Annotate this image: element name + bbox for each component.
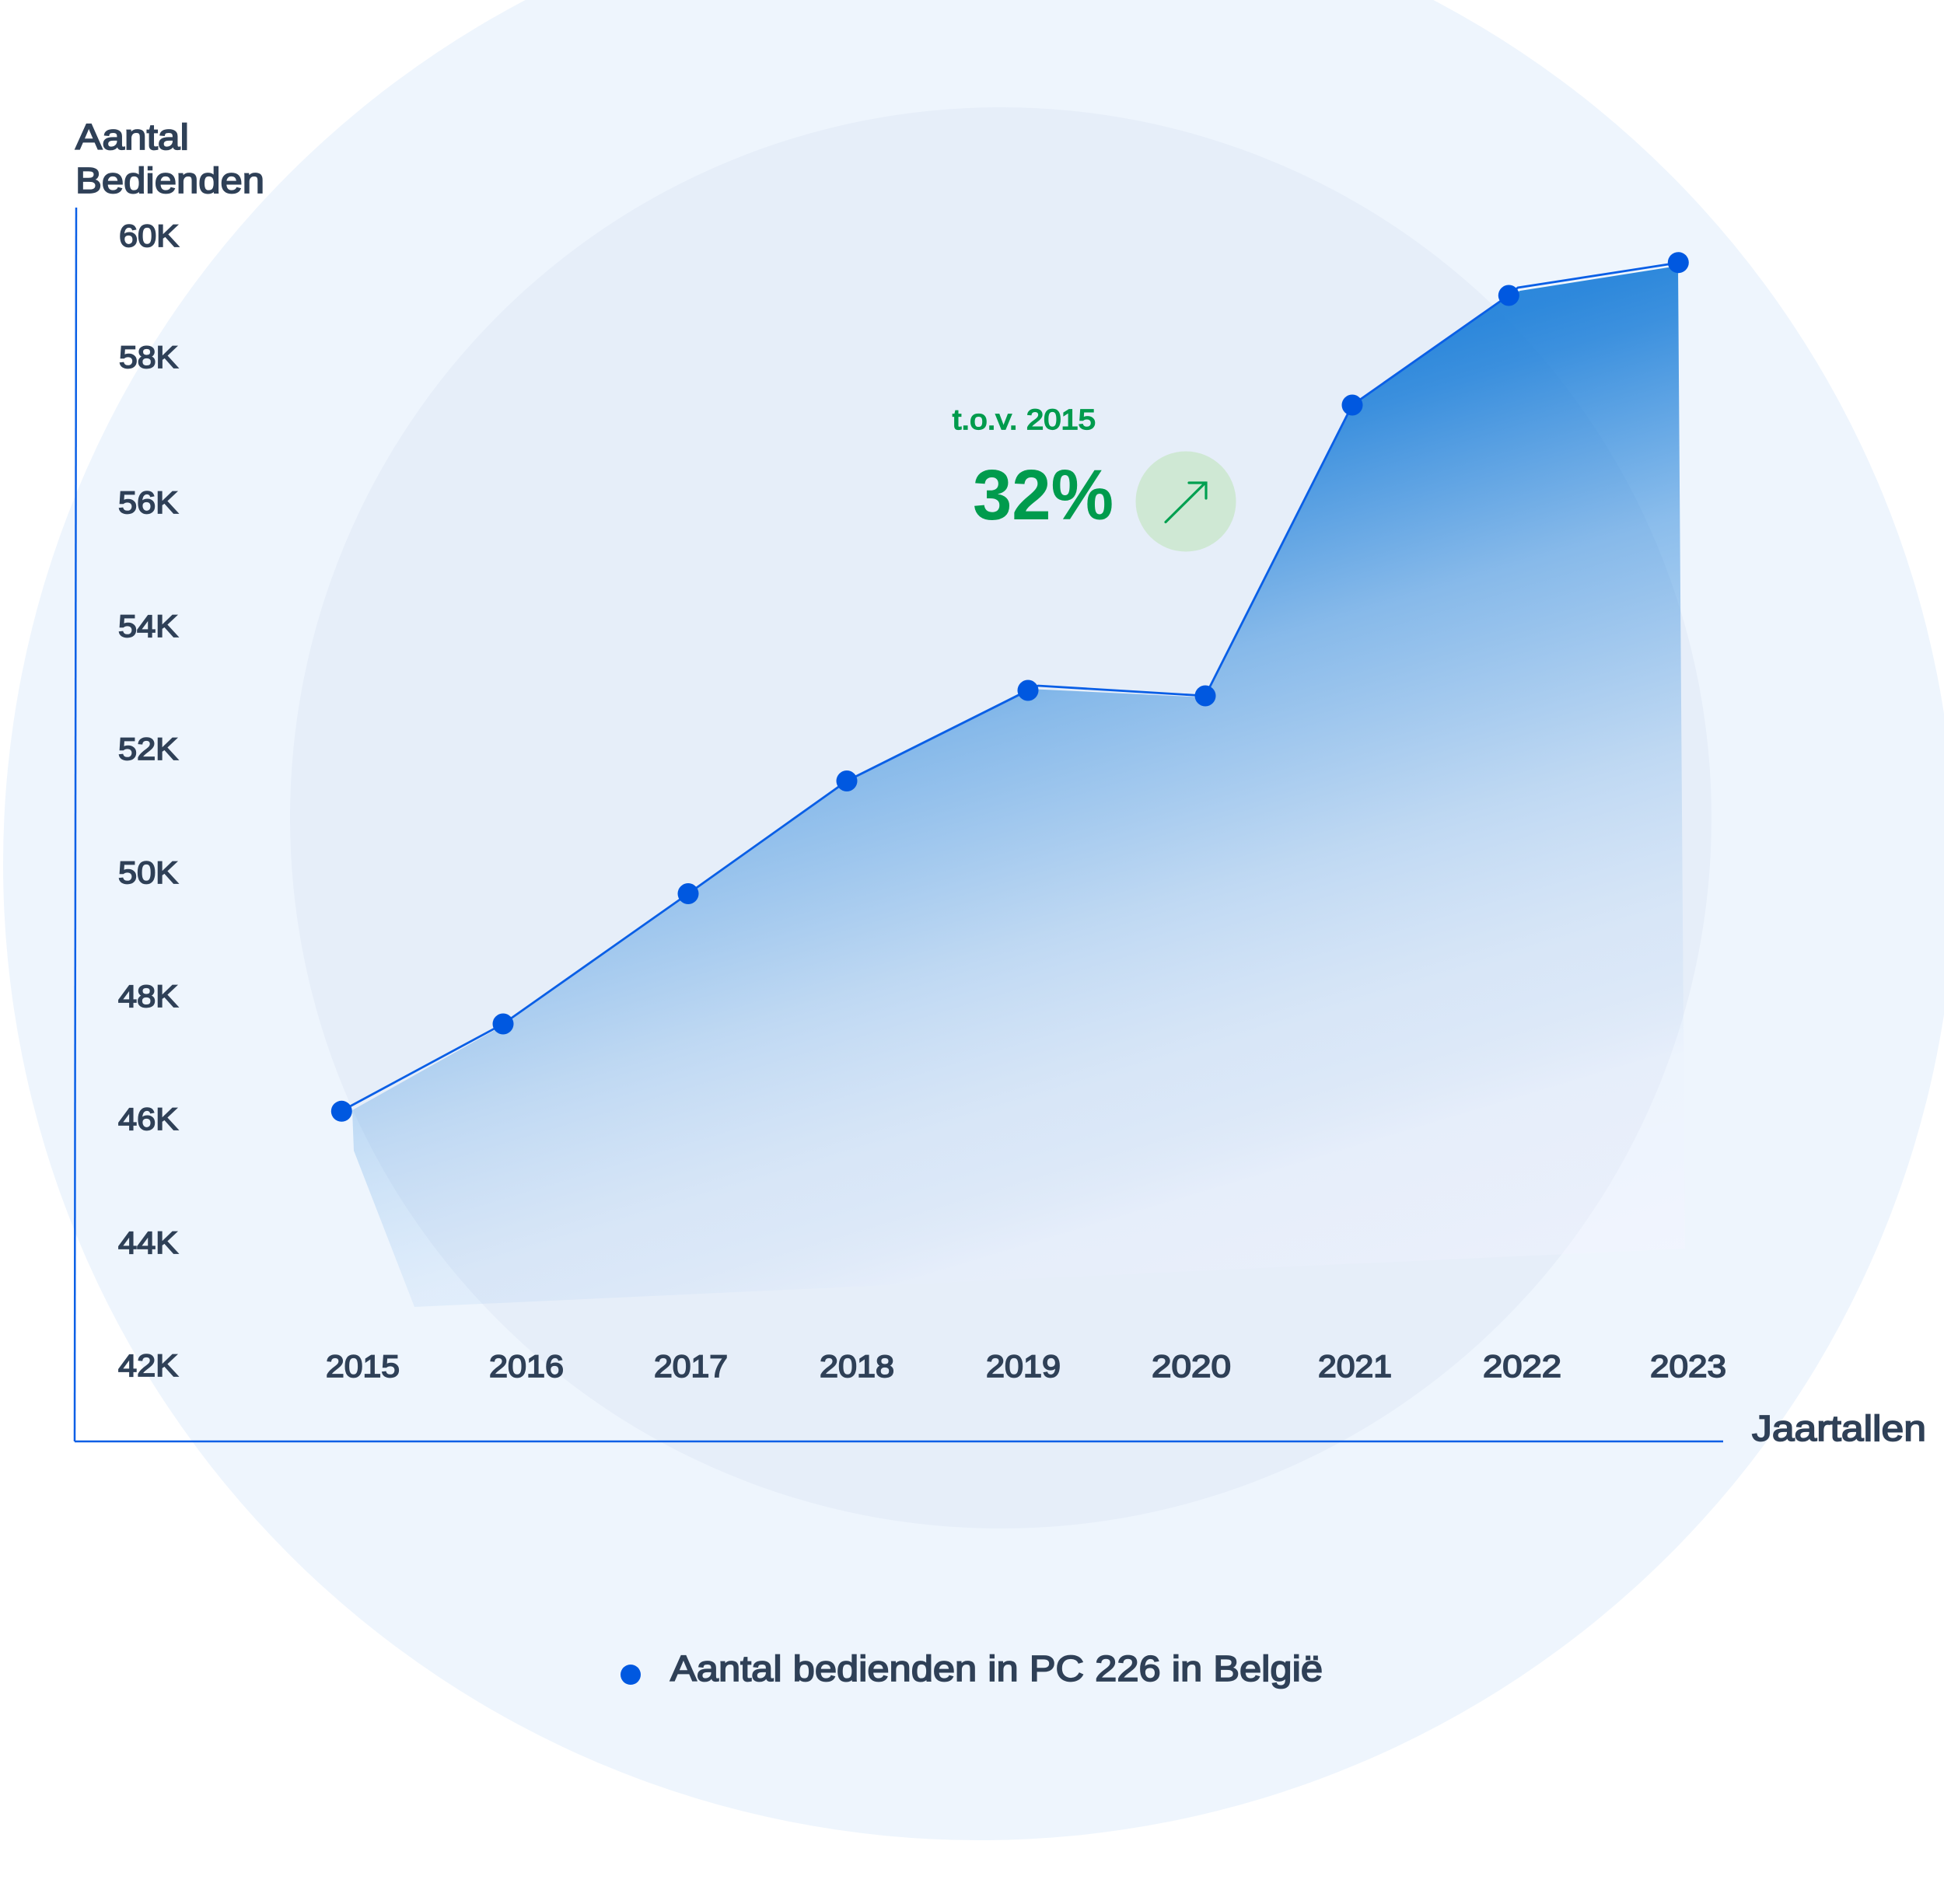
icon: arrow up-right in circle	[1135, 451, 1236, 552]
y axis labels: 42K	[118, 1349, 178, 1383]
y axis labels: 48K	[118, 980, 178, 1014]
callout caption: t.o.v. 2015	[953, 404, 1096, 435]
x axis labels: 2022	[1483, 1350, 1561, 1384]
x axis labels	[326, 1350, 1726, 1384]
y axis line	[75, 208, 76, 1441]
legend	[621, 1648, 1323, 1689]
y axis labels: 56K	[118, 486, 178, 520]
chart area fill	[352, 266, 1685, 1307]
data points	[331, 252, 1689, 1122]
x axis labels: 2023	[1650, 1350, 1726, 1384]
x axis labels: 2018	[820, 1350, 894, 1384]
y axis title	[75, 117, 264, 201]
x axis labels: 2021	[1318, 1350, 1392, 1384]
background: inner circle	[290, 107, 1711, 1528]
legend dot	[621, 1665, 641, 1685]
x axis labels: 2017	[654, 1350, 728, 1384]
y axis labels: 44K	[118, 1226, 178, 1260]
x axis labels: 2020	[1152, 1350, 1231, 1384]
y axis labels: 54K	[118, 610, 178, 644]
legend label: Aantal bedienden in PC 226 in België	[670, 1648, 1323, 1689]
callout: 32% growth	[953, 404, 1236, 552]
x axis title: Jaartallen	[1752, 1408, 1926, 1448]
x axis labels: 2016	[489, 1350, 564, 1384]
y axis labels: 60K	[119, 219, 179, 253]
y axis labels: 58K	[119, 341, 178, 375]
y axis labels: 46K	[118, 1102, 178, 1137]
data line	[341, 263, 1678, 1111]
y axis title: Bedienden	[75, 160, 264, 201]
callout value: 32%	[973, 456, 1114, 535]
y axis labels	[118, 219, 179, 1383]
y axis labels: 52K	[118, 732, 178, 767]
x axis line	[75, 1441, 1723, 1442]
x axis labels: 2015	[326, 1350, 400, 1384]
y axis title: Aantal	[75, 117, 189, 157]
x axis labels: 2019	[986, 1350, 1061, 1384]
y axis labels: 50K	[118, 856, 178, 890]
